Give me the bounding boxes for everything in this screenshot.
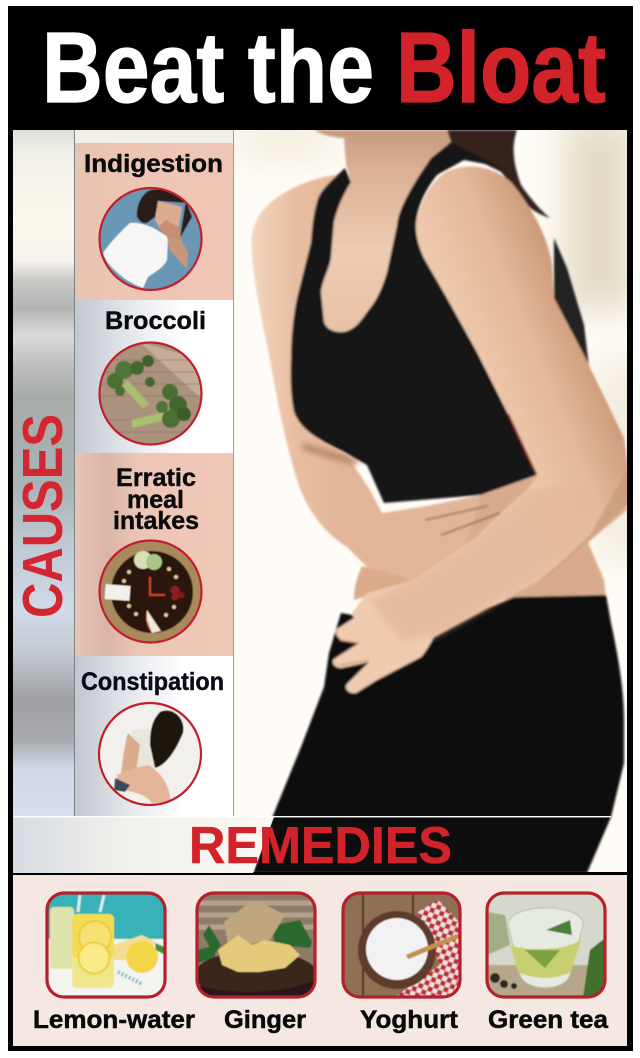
label: Lemon-water: Lemon-water <box>33 1006 195 1034</box>
heading: REMEDIES: REMEDIES <box>189 817 452 875</box>
label: Green tea: Green tea <box>488 1006 609 1034</box>
left strip: causes <box>11 130 234 816</box>
black top <box>291 142 537 503</box>
heading: Erratic meal intakes: Erratic <box>116 464 196 492</box>
heading: Erratic meal intakes: meal <box>127 486 184 514</box>
icon: clock plate <box>99 540 203 644</box>
heading: Indigestion: Indigestion <box>84 150 223 178</box>
panel: Indigestion <box>75 143 233 300</box>
shadow under chest <box>303 446 358 462</box>
forearm shade <box>557 476 627 568</box>
heading: Erratic meal intakes <box>113 464 199 535</box>
photo: woman holding stomach <box>234 120 640 873</box>
title bar <box>8 6 633 130</box>
panel: Erratic meal intakes <box>75 453 233 656</box>
black leggings <box>253 595 624 873</box>
remedy: Lemon-water <box>33 893 195 1034</box>
left arm and upper hand <box>252 168 501 580</box>
icon: broccoli on wood <box>99 342 203 446</box>
neck and chest <box>314 130 451 332</box>
CAUSES label: CAUSES <box>11 414 75 618</box>
panel: Broccoli <box>75 300 233 453</box>
remedy: Ginger <box>194 893 318 1034</box>
lower hand tone <box>340 640 369 665</box>
remedies band <box>13 816 611 875</box>
belly <box>460 475 606 600</box>
title: Bloat: Bloat <box>396 12 606 124</box>
remedy: Yoghurt <box>343 893 462 1034</box>
label: Yoghurt: Yoghurt <box>360 1006 459 1034</box>
label: Ginger: Ginger <box>224 1006 306 1034</box>
black top back panel <box>554 238 589 367</box>
panel: remedies <box>13 875 627 1046</box>
heading: Constipation: Constipation <box>81 668 224 696</box>
right arm and lower hand <box>333 166 632 693</box>
icon: woman on toilet <box>98 703 202 807</box>
remedy: Green tea <box>487 893 609 1034</box>
hair <box>447 130 550 218</box>
title: Beat the: Beat the <box>42 12 374 124</box>
panel: Constipation <box>75 656 233 816</box>
red stitch <box>508 414 536 474</box>
heading: Erratic meal intakes: intakes <box>113 507 199 535</box>
heading: Broccoli: Broccoli <box>105 307 206 335</box>
icon: woman with hand over mouth <box>99 187 203 291</box>
forearm tone <box>373 490 573 645</box>
upper hand finger lines <box>425 506 500 535</box>
skin between hands <box>354 566 414 600</box>
